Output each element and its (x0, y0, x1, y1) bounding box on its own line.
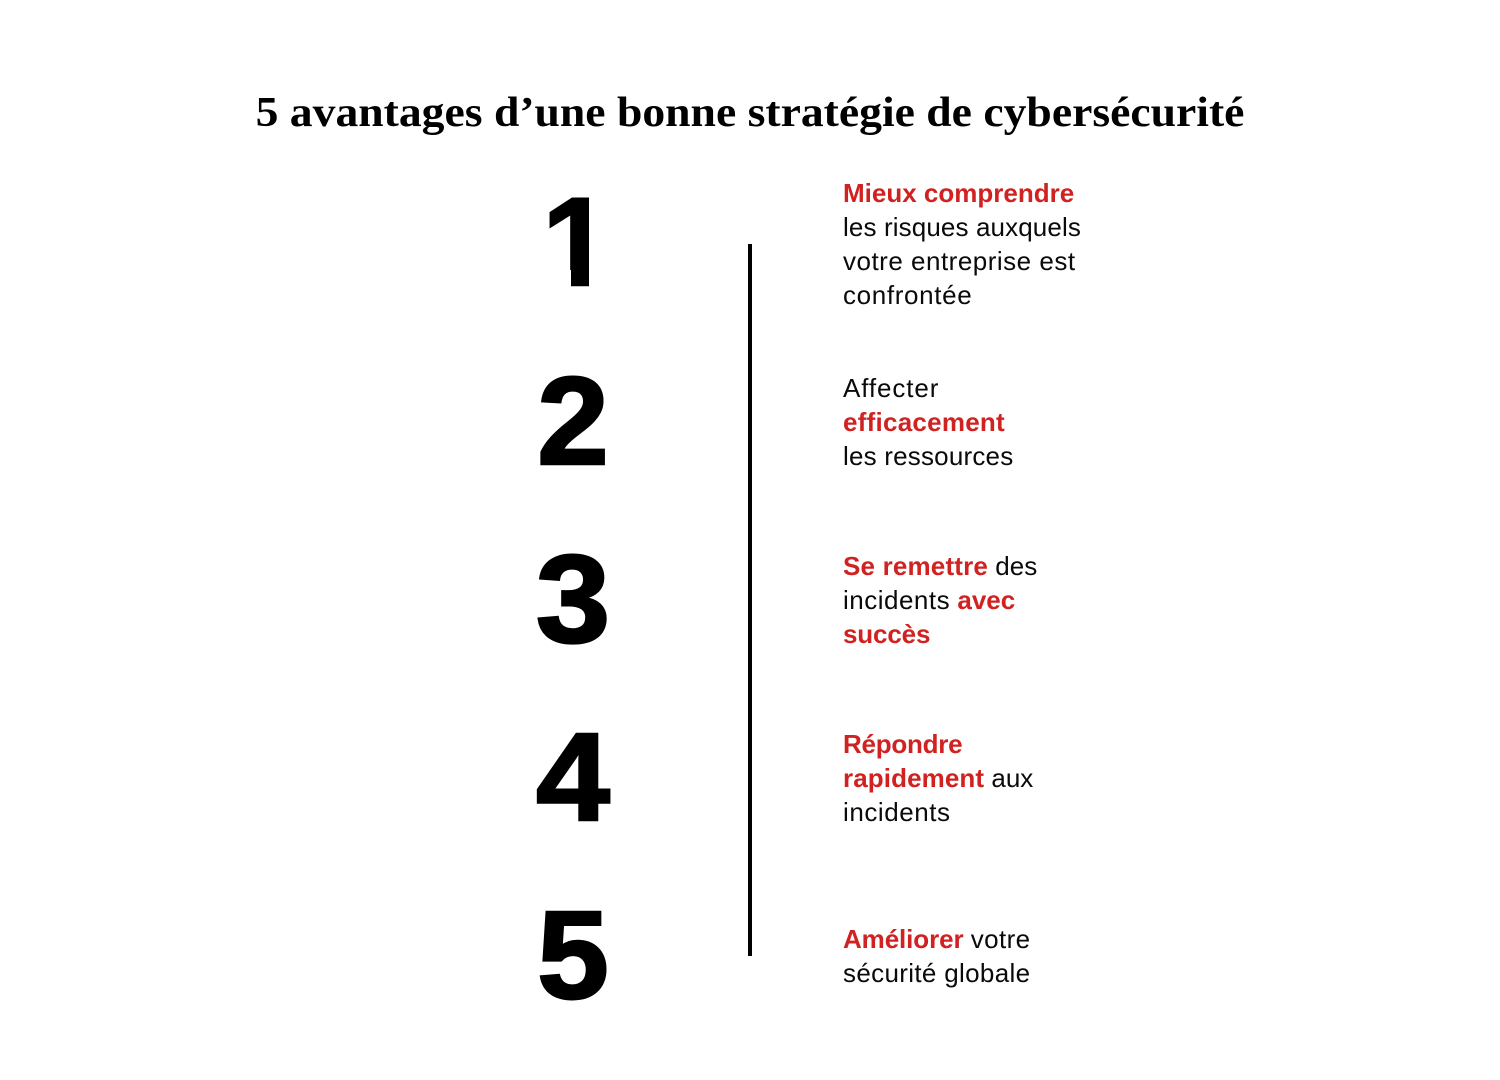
number 4: 4 (536, 708, 610, 847)
number 1: 1 (542, 173, 612, 312)
text: benefit 1: votre entreprise est (843, 246, 1076, 276)
text: benefit 4: rapidement aux (843, 763, 1033, 793)
text: benefit 4 (843, 729, 1033, 827)
text: benefit 4: Répondre (843, 729, 962, 759)
text: benefit 3 (843, 551, 1037, 649)
text: benefit 5 (843, 924, 1031, 988)
number 2: 2 (537, 352, 609, 491)
number 3: 3 (536, 530, 610, 669)
text: benefit 3: incidents avec (843, 585, 1015, 615)
text: benefit 1: les risques auxquels (843, 212, 1081, 242)
text: benefit 2: les ressources (843, 441, 1013, 471)
text: benefit 3: Se remettre des (843, 551, 1037, 581)
text: benefit 2 (843, 373, 1013, 471)
text: benefit 1: Mieux comprendre (843, 178, 1074, 208)
text: benefit 1 (843, 178, 1081, 310)
text: benefit 5: Améliorer votre (843, 924, 1031, 954)
title: 5 avantages d’une bonne stratégie de cybersécurité (256, 89, 1244, 136)
text: benefit 2: efficacement (843, 407, 1005, 437)
number 5: 5 (537, 886, 609, 1025)
text: benefit 4: incidents (843, 797, 951, 827)
vertical divider line (748, 244, 752, 956)
text: benefit 3: succès (843, 619, 930, 649)
text: benefit 1: confrontée (843, 280, 972, 310)
text: benefit 2: Affecter (843, 373, 939, 403)
text: benefit 5: sécurité globale (843, 958, 1030, 988)
